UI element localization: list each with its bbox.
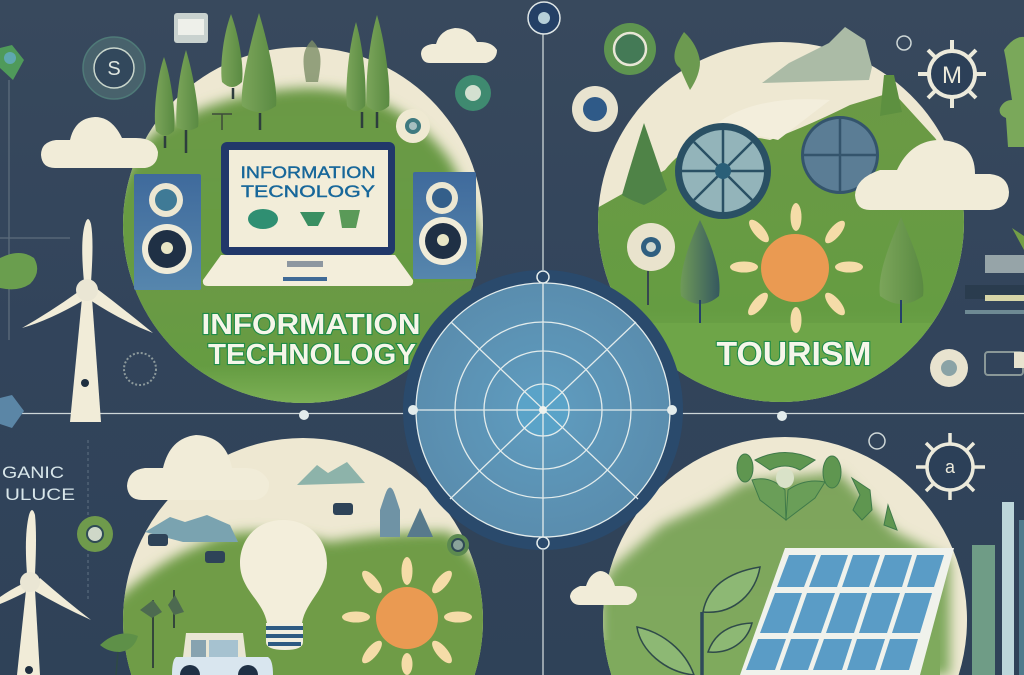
screen text: INFORMATION bbox=[240, 163, 376, 182]
solar panel bbox=[740, 548, 954, 675]
bars: lower right bbox=[972, 502, 1024, 675]
compass icon bbox=[627, 223, 675, 305]
faint tree bbox=[304, 40, 320, 82]
icon: light bulb bbox=[240, 520, 327, 650]
icon: plant bbox=[637, 567, 760, 675]
icon: sun bbox=[342, 557, 472, 675]
right edge figure bbox=[1000, 37, 1024, 147]
small icons: M bbox=[942, 62, 962, 89]
sun bbox=[730, 203, 863, 333]
heading bbox=[202, 309, 420, 371]
hills bbox=[297, 462, 365, 485]
clouds bbox=[41, 28, 637, 605]
small icons: S bbox=[107, 58, 121, 80]
small icons: a bbox=[945, 457, 956, 477]
saplings bbox=[100, 590, 184, 675]
trees bbox=[155, 13, 389, 153]
text: organic fragment: ULUCE bbox=[5, 485, 75, 504]
wind turbines bbox=[0, 219, 153, 675]
mountain bbox=[762, 27, 872, 83]
panel: lower left bbox=[100, 438, 500, 675]
speakers bbox=[134, 172, 476, 290]
text: organic fragment bbox=[2, 463, 75, 504]
central radar dial bbox=[403, 270, 683, 550]
panel: lower right bbox=[600, 437, 967, 675]
trees bbox=[622, 123, 923, 323]
small tree and figure bbox=[674, 32, 902, 116]
heading: TOURISM bbox=[716, 335, 872, 372]
icon: car bbox=[172, 633, 273, 675]
panel: tourism bbox=[590, 27, 1009, 403]
gear icon top right bbox=[918, 40, 986, 108]
icon: leaf emblem bbox=[737, 452, 897, 530]
gear icon lower right bbox=[916, 433, 985, 500]
laptop: TECNOLOGY bbox=[241, 182, 375, 201]
panel: information technology bbox=[110, 13, 490, 410]
wheels bbox=[675, 116, 879, 219]
laptop bbox=[203, 142, 413, 286]
heading: INFORMATION bbox=[202, 309, 420, 341]
cloud bbox=[855, 140, 1009, 210]
heading: TECHNOLOGY bbox=[208, 339, 416, 371]
text: organic fragment: GANIC bbox=[2, 463, 64, 482]
